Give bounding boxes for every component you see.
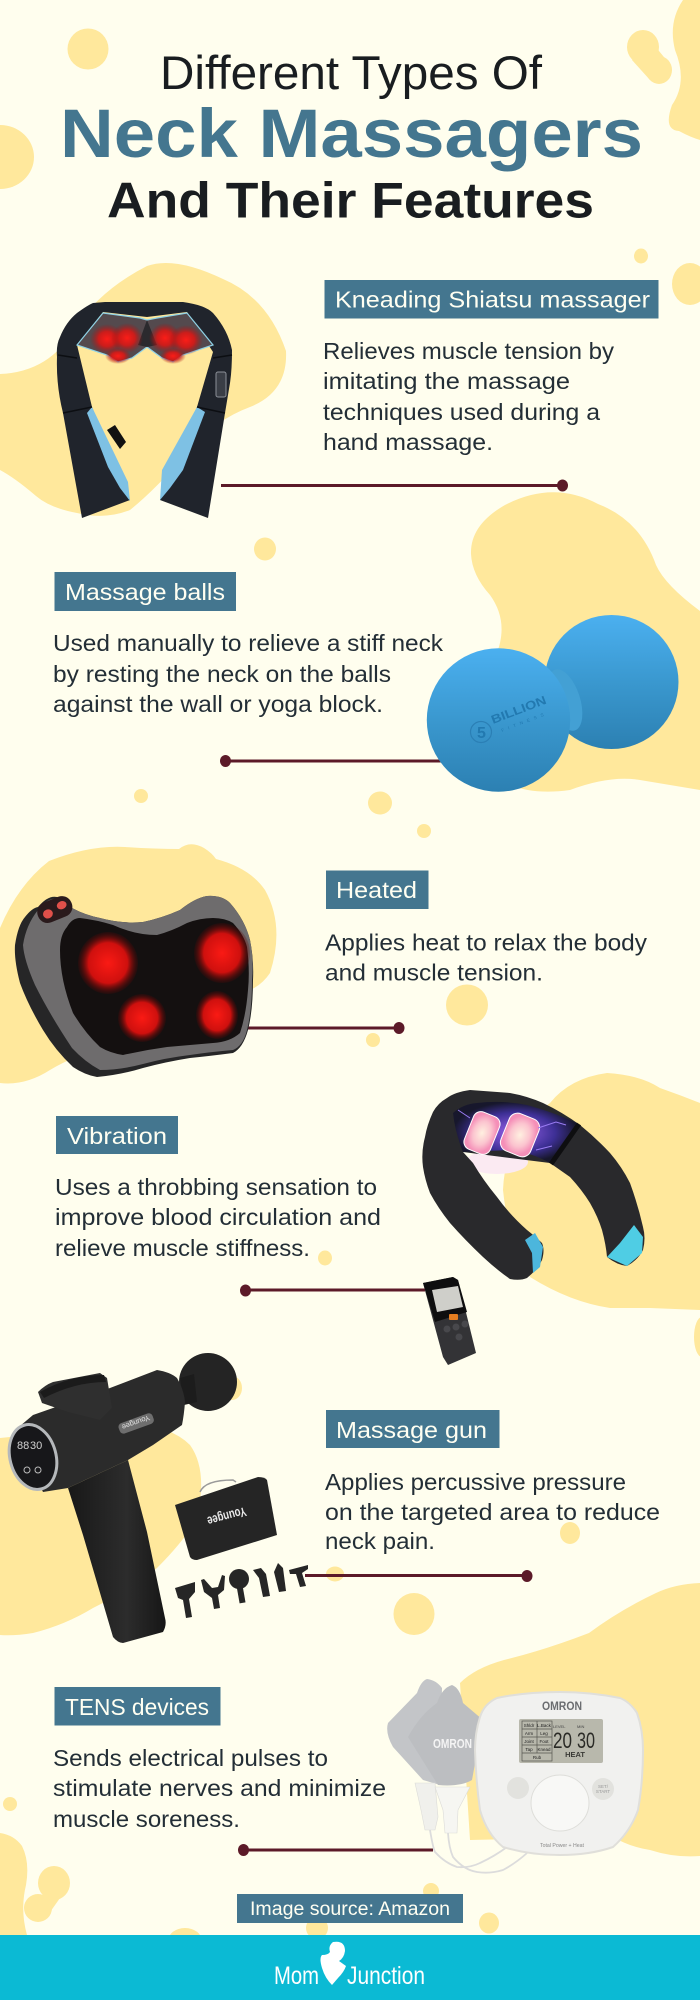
connector line	[240, 1284, 425, 1296]
icon: massage balls	[427, 615, 678, 792]
icon: neck band massager	[422, 1090, 644, 1280]
footer logo: Junction	[347, 1962, 425, 1990]
icon: TENS control unit: 30	[577, 1728, 595, 1753]
panel: kneading shiatsu massager	[57, 280, 659, 518]
body text: and muscle tension.	[325, 960, 543, 986]
icon: TENS control unit: 20	[553, 1728, 572, 1753]
tag: massage gun	[326, 1410, 500, 1448]
body text: neck pain.	[325, 1528, 435, 1554]
icon: massage attachments	[175, 1563, 308, 1618]
panel: massage balls	[53, 572, 678, 792]
icon: TENS control unit: MIN	[577, 1724, 584, 1729]
icon: massage balls: FITNESS	[501, 712, 544, 733]
body text: techniques used during a	[323, 399, 600, 425]
icon: TENS control unit: L.Back	[537, 1723, 552, 1728]
footer band	[0, 1935, 700, 2000]
body text: relieve muscle stiffness.	[55, 1235, 310, 1261]
icon: carry bag	[175, 1477, 277, 1560]
panel: heated	[15, 870, 648, 1077]
icon: carry bag: Youngee	[206, 1504, 248, 1529]
body text: on the targeted area to reduce	[325, 1499, 660, 1525]
tag: massage balls: Massage balls	[65, 579, 225, 605]
body text: Used manually to relieve a stiff neck	[53, 630, 444, 656]
body text	[53, 1745, 386, 1832]
icon: TENS control unit: Tap	[525, 1747, 533, 1752]
connector line	[240, 1022, 404, 1034]
body text: imitating the massage	[323, 368, 570, 394]
icon: TENS control unit: HEAT	[565, 1750, 585, 1759]
tag: kneading shiatsu massager	[324, 280, 658, 318]
tag: heated	[326, 870, 428, 909]
icon: massage gun	[2, 1353, 237, 1643]
icon: TENS control unit: Knead	[537, 1747, 551, 1752]
icon: TENS electrode pads: OMRON	[433, 1737, 472, 1751]
title line 2: Neck Massagers	[60, 95, 643, 172]
icon: massage gun: Youngee	[121, 1413, 151, 1432]
icon: TENS control unit: Leg	[540, 1731, 548, 1736]
tag: vibration: Vibration	[67, 1123, 167, 1149]
icon: TENS electrode pads	[387, 1679, 527, 1873]
icon: TENS control unit: Total Power + Heat	[540, 1843, 585, 1849]
title line 3: And Their Features	[107, 172, 594, 228]
icon: TENS control unit: Arm	[525, 1731, 533, 1736]
body text: Relieves muscle tension by	[323, 338, 615, 364]
body text: Applies percussive pressure	[325, 1469, 626, 1495]
source tag	[237, 1894, 463, 1923]
body text: muscle soreness.	[53, 1806, 240, 1832]
body text: against the wall or yoga block.	[53, 691, 383, 717]
body text: Applies heat to relax the body	[325, 930, 648, 956]
body text	[325, 930, 648, 986]
tag: massage gun: Massage gun	[336, 1417, 487, 1443]
icon: TENS control unit: Shldr	[524, 1723, 535, 1728]
icon: TENS control unit: LEVEL	[553, 1724, 566, 1729]
panel: vibration	[55, 1090, 644, 1365]
footer logo	[274, 1942, 425, 1990]
body text: by resting the neck on the balls	[53, 661, 391, 687]
panel: TENS devices	[53, 1679, 643, 1873]
connector line	[238, 1844, 433, 1856]
tag: kneading shiatsu massager: Kneading Shiatsu massager	[335, 286, 650, 312]
connector line	[305, 1570, 532, 1582]
connector line	[220, 755, 442, 767]
icon: TENS control unit: Foot	[539, 1739, 549, 1744]
icon: TENS control unit: START	[596, 1789, 610, 1794]
icon: neck massager	[57, 302, 232, 518]
icon: massage balls: 5	[477, 725, 486, 742]
icon: massage balls: BILLION	[489, 693, 548, 727]
icon: TENS control unit: Joint	[524, 1739, 534, 1744]
source tag: Image source: Amazon	[250, 1899, 450, 1920]
body text: hand massage.	[323, 429, 493, 455]
title	[60, 46, 643, 228]
tag: TENS devices: TENS devices	[65, 1694, 209, 1720]
panel: massage gun	[2, 1353, 660, 1643]
title line 1: Different Types Of	[160, 46, 543, 99]
icon: TENS control unit: Rub	[533, 1755, 542, 1760]
body text: Uses a throbbing sensation to	[55, 1174, 377, 1200]
icon: massage gun: 88	[17, 1440, 29, 1452]
icon: TENS control unit: OMRON	[542, 1699, 582, 1713]
body text	[325, 1469, 660, 1554]
body text	[55, 1174, 381, 1261]
tag: vibration	[56, 1116, 178, 1154]
body text: improve blood circulation and	[55, 1204, 381, 1230]
icon: massage gun: 30	[30, 1440, 42, 1452]
body text	[323, 338, 615, 455]
tag: TENS devices	[54, 1687, 220, 1726]
tag: massage balls	[54, 572, 236, 611]
tag: heated: Heated	[336, 877, 417, 903]
icon: TENS control unit	[475, 1692, 643, 1855]
body text	[53, 630, 444, 717]
connector line	[221, 480, 568, 492]
icon: remote control	[423, 1277, 476, 1365]
body text: stimulate nerves and minimize	[53, 1775, 386, 1801]
icon: heated pillow	[15, 893, 253, 1077]
footer logo: Mom	[274, 1962, 319, 1990]
icon: TENS control unit: SET/	[598, 1784, 609, 1789]
body text: Sends electrical pulses to	[53, 1745, 328, 1771]
